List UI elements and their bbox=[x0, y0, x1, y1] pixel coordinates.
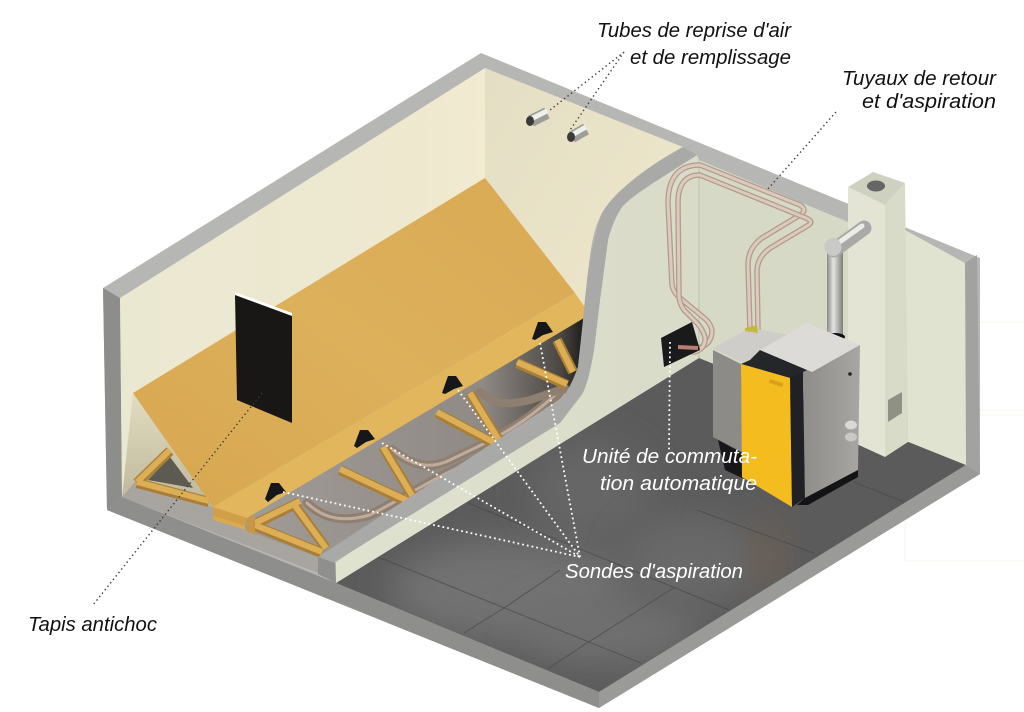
wooden trusses bbox=[137, 340, 573, 553]
label: switching unit bbox=[582, 445, 757, 495]
label: pipes: et d'aspiration bbox=[862, 90, 996, 113]
building shell: grey cut walls bbox=[103, 53, 980, 708]
curved partition wall top bbox=[318, 147, 697, 563]
panel: boiler room walls bbox=[336, 155, 966, 583]
return and suction pipes bbox=[668, 165, 811, 352]
label: probes: Sondes d'aspiration bbox=[565, 560, 743, 583]
storage room under-floor space bbox=[122, 316, 584, 573]
automatic switching unit bbox=[661, 322, 700, 367]
leader lines: dark dots bbox=[93, 52, 836, 605]
label: mat: Tapis antichoc bbox=[28, 613, 158, 636]
label: switching unit: Unité de commuta- bbox=[582, 445, 757, 468]
label: tubes: et de remplissage bbox=[630, 46, 791, 69]
label: tubes: Tubes de reprise d'air bbox=[597, 19, 792, 42]
anti-shock mat bbox=[235, 292, 292, 423]
suction hoses under the sloped floor bbox=[307, 388, 565, 519]
faint background traces bbox=[905, 322, 1024, 561]
leader lines: white dots bbox=[283, 342, 670, 557]
chimney with flue opening bbox=[848, 172, 908, 457]
label: pipes bbox=[842, 67, 997, 113]
floor with tiles bbox=[336, 358, 966, 692]
panel: storage room walls bbox=[120, 68, 683, 497]
label: tubes bbox=[597, 19, 792, 69]
pellet boiler bbox=[713, 323, 860, 507]
partition wall end bbox=[318, 557, 336, 583]
panel: sloped wooden floor bbox=[133, 178, 584, 526]
suction probes bbox=[265, 322, 553, 502]
label: switching unit: tion automatique bbox=[600, 472, 757, 495]
flue pipe bbox=[824, 226, 864, 341]
label: pipes: Tuyaux de retour bbox=[842, 67, 997, 90]
air return and filling tubes bbox=[526, 111, 586, 142]
